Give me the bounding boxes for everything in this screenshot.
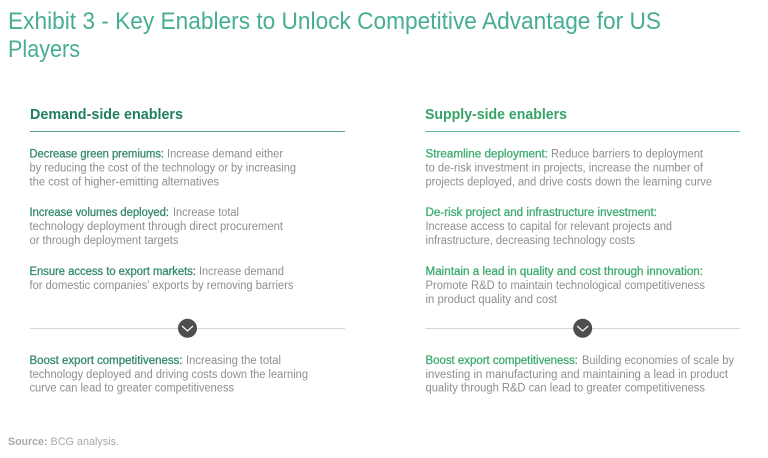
text block: increase volumes deployed: or through deployment targets (30, 235, 179, 247)
text block: streamline deployment: Streamline deployment: (426, 148, 548, 160)
text block: maintain a lead in quality and cost: Promote R&D to maintain technological competitiveness (426, 280, 705, 292)
text block: ensure access to export markets: for domestic companies’ exports by removing barriers (30, 280, 294, 292)
text block: boost export competitiveness: technology deployed and driving costs down the learning (30, 369, 308, 381)
text block: ensure access to export markets: Increase demand (199, 266, 284, 278)
text block: maintain a lead in quality and cost: Maintain a lead in quality and cost through innovation: (426, 266, 703, 278)
icon: down chevron (573, 319, 592, 338)
text block: de-risk project and infrastructure investment: De-risk project and infrastructure investment: (426, 207, 657, 219)
text block: increase volumes deployed: Increase volumes deployed: (30, 207, 169, 219)
text block: boost export competitiveness (426, 355, 734, 394)
title: Exhibit 3 - Key Enablers to Unlock Competitive Advantage for US (8, 8, 661, 35)
text block: decrease green premiums (30, 148, 296, 188)
text block: boost export competitiveness: quality through R&D can lead to greater competitiveness (426, 382, 705, 394)
text block: streamline deployment: to de-risk investment in projects, increase the number of (426, 162, 704, 174)
panel: supply-side enablers (425, 107, 740, 394)
text block: maintain a lead in quality and cost (426, 266, 705, 306)
text block: decrease green premiums: the cost of higher-emitting alternatives (30, 176, 219, 188)
heading: supply-side enablers: Supply-side enablers (425, 107, 567, 123)
text block: boost export competitiveness: curve can lead to greater competitiveness (30, 382, 234, 394)
text block: increase volumes deployed: Increase total (173, 207, 239, 219)
text block: maintain a lead in quality and cost: in product quality and cost (426, 294, 558, 306)
text block: boost export competitiveness: Building economies of scale by (582, 355, 734, 367)
text block: ensure access to export markets: Ensure access to export markets: (30, 266, 196, 278)
text block: boost export competitiveness: Boost export competitiveness: (30, 355, 182, 367)
text block: de-risk project and infrastructure investment (426, 207, 672, 247)
text block: decrease green premiums: Decrease green premiums: (30, 148, 164, 160)
text block: boost export competitiveness: Boost export competitiveness: (426, 355, 578, 367)
text block: streamline deployment: Reduce barriers to deployment (551, 148, 704, 160)
panel: demand-side enablers (30, 107, 345, 394)
text block: boost export competitiveness: investing in manufacturing and maintaining a lead in product (426, 369, 729, 381)
title (8, 8, 661, 63)
text block: streamline deployment: projects deployed, and drive costs down the learning curve (426, 176, 712, 188)
text block: increase volumes deployed: technology deployment through direct procurement (30, 221, 284, 233)
text block: de-risk project and infrastructure investment: Increase access to capital for relevant projects and (426, 221, 672, 233)
text block: increase volumes deployed (30, 207, 284, 247)
source note: BCG analysis. (50, 436, 119, 448)
text block: decrease green premiums: Increase demand either (167, 148, 283, 160)
text block: ensure access to export markets (30, 266, 294, 292)
text block: decrease green premiums: by reducing the cost of the technology or by increasing (30, 162, 296, 174)
text block: boost export competitiveness: Increasing the total (186, 355, 281, 367)
text block: boost export competitiveness (30, 355, 308, 394)
icon: down chevron (178, 319, 197, 338)
text block: streamline deployment (426, 148, 712, 188)
heading: demand-side enablers: Demand-side enablers (30, 107, 183, 123)
text block: de-risk project and infrastructure investment: infrastructure, decreasing technology costs (426, 235, 635, 247)
source note: Source: (8, 436, 48, 448)
title: Players (8, 36, 80, 63)
source note (8, 436, 119, 448)
